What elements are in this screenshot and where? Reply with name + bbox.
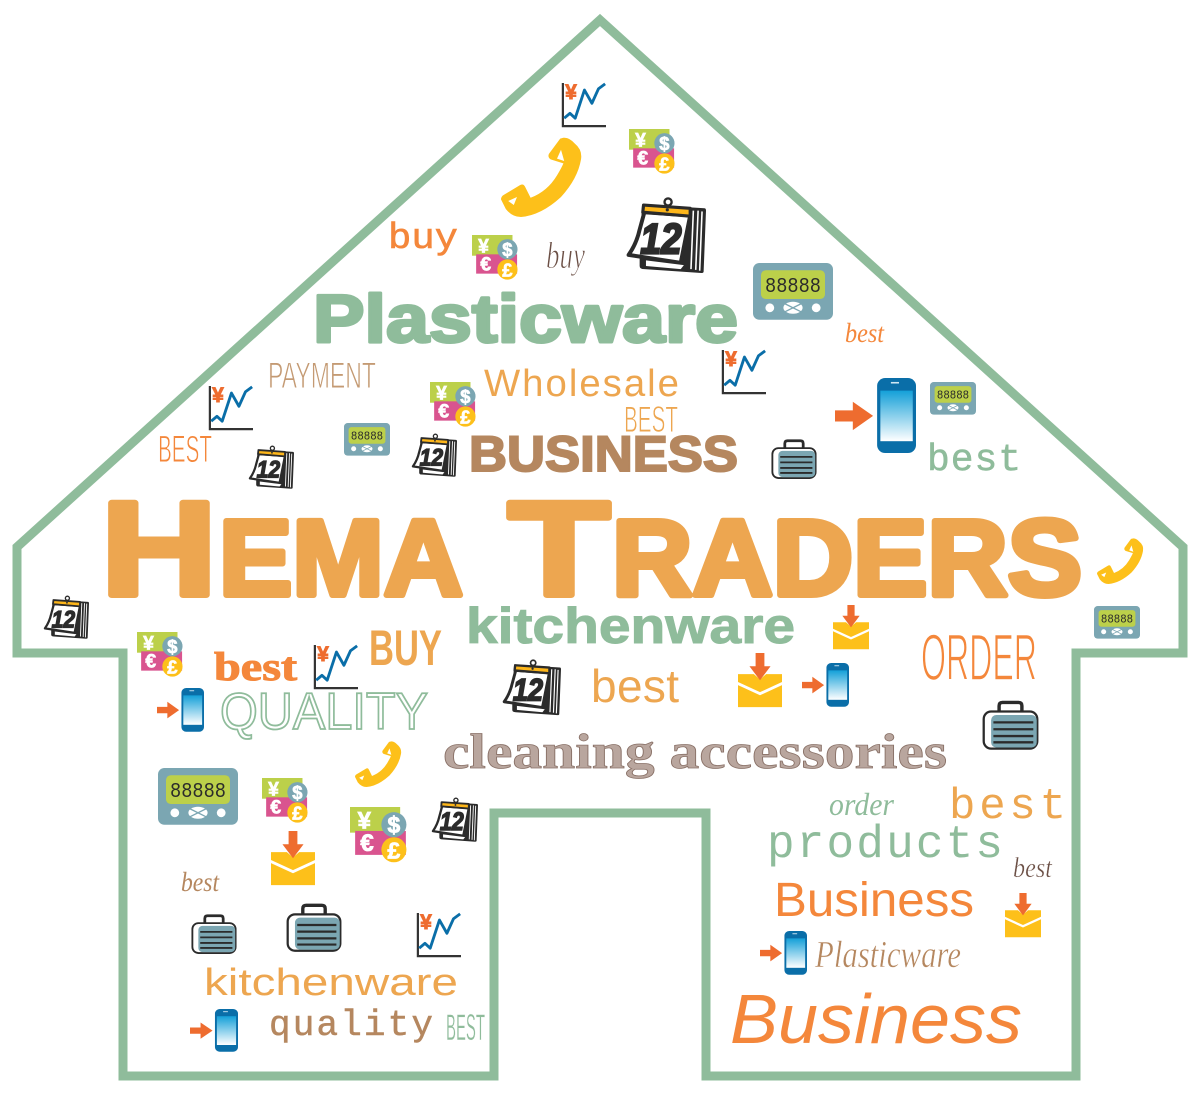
word: best mono tan: best xyxy=(949,782,1066,832)
title: Hema Traders: T xyxy=(508,475,610,624)
title: Hema Traders: H xyxy=(101,475,217,624)
infographic: Hema Traders word cloud house: ORDER xyxy=(921,620,1037,694)
icon: phone large xyxy=(501,138,581,217)
icon: mail right xyxy=(1005,893,1041,937)
icon: calendar far left xyxy=(45,596,89,639)
word: BUY: BUY xyxy=(369,620,442,676)
icon: money left xyxy=(137,632,183,677)
word: best bold orange: best xyxy=(214,644,298,689)
icon: mobile with arrow left xyxy=(157,688,204,732)
icon: calendar by best xyxy=(504,660,561,715)
icon: phone lower xyxy=(355,741,401,787)
icon: briefcase large lower xyxy=(288,905,340,951)
word: Business sans: Business xyxy=(774,874,974,927)
icon: calendar large xyxy=(629,198,706,273)
icon: mobile with arrow right xyxy=(760,931,807,975)
icon: pager far right xyxy=(1094,606,1140,639)
icon: money center xyxy=(430,382,476,427)
icon: mail large xyxy=(738,653,782,707)
icon: pager right xyxy=(930,382,976,415)
icon: chart top xyxy=(563,81,606,126)
word: BEST orange: BEST xyxy=(158,429,212,471)
word: kitchenware bold: kitchenware xyxy=(466,598,795,654)
title: Hema Traders xyxy=(101,475,1082,624)
icon: mail lower left xyxy=(271,831,315,885)
icon: money top xyxy=(629,129,675,174)
word: Business script: Business xyxy=(730,980,1022,1058)
icon: pager large lower xyxy=(158,768,238,825)
icon: mail small top xyxy=(833,605,869,649)
word: best script small: best xyxy=(181,867,220,897)
word: BUSINESS: BUSINESS xyxy=(469,426,738,482)
word: buy orange: buy xyxy=(388,218,458,259)
word: kitchenware tan: kitchenware xyxy=(204,962,458,1004)
icon: briefcase small lower xyxy=(192,916,236,953)
icon: mobile with arrow large xyxy=(835,378,916,453)
word: best script orange: best xyxy=(845,318,885,348)
word: Plasticware: Plasticware xyxy=(313,281,738,357)
infographic: Hema Traders word cloud house: BEST xyxy=(446,1007,485,1048)
icon: pager left xyxy=(344,423,390,456)
icon: chart left xyxy=(210,384,253,429)
word: quality: quality xyxy=(269,1005,433,1046)
icon: chart center xyxy=(723,348,766,393)
icon: briefcase right xyxy=(984,702,1037,749)
icon: phone right xyxy=(1097,538,1143,584)
icon: money lower xyxy=(262,778,308,823)
title: Hema Traders: RADERS xyxy=(612,497,1082,618)
icon: calendar center xyxy=(413,434,457,477)
icon: mobile with arrow bottom xyxy=(190,1009,238,1052)
word: Plasticware script: Plasticware xyxy=(814,934,961,976)
word: QUALITY outline: QUALITY xyxy=(220,683,428,741)
icon: money by buy xyxy=(472,235,518,280)
icon: mobile with arrow center xyxy=(802,663,849,707)
word: products: products xyxy=(767,819,1003,871)
word: buy script: buy xyxy=(546,235,585,277)
icon: calendar lower xyxy=(433,798,478,842)
word: order script: order xyxy=(829,786,895,822)
word: PAYMENT: PAYMENT xyxy=(268,355,376,396)
word: Wholesale: Wholesale xyxy=(484,363,681,405)
icon: chart lower left xyxy=(315,643,358,688)
word: best script brown: best xyxy=(1013,852,1053,884)
word: best tan: best xyxy=(591,660,679,712)
icon: pager large top xyxy=(753,263,833,320)
word: cleaning accessories: cleaning accessories xyxy=(443,723,947,779)
word: best green mono: best xyxy=(927,439,1021,482)
word: BEST tan: BEST xyxy=(624,399,678,440)
title: Hema Traders: EMA xyxy=(219,497,463,618)
icon: briefcase center xyxy=(772,441,816,478)
icon: money large xyxy=(350,807,406,863)
icon: chart bottom xyxy=(418,911,461,956)
icon: calendar left xyxy=(250,446,294,489)
